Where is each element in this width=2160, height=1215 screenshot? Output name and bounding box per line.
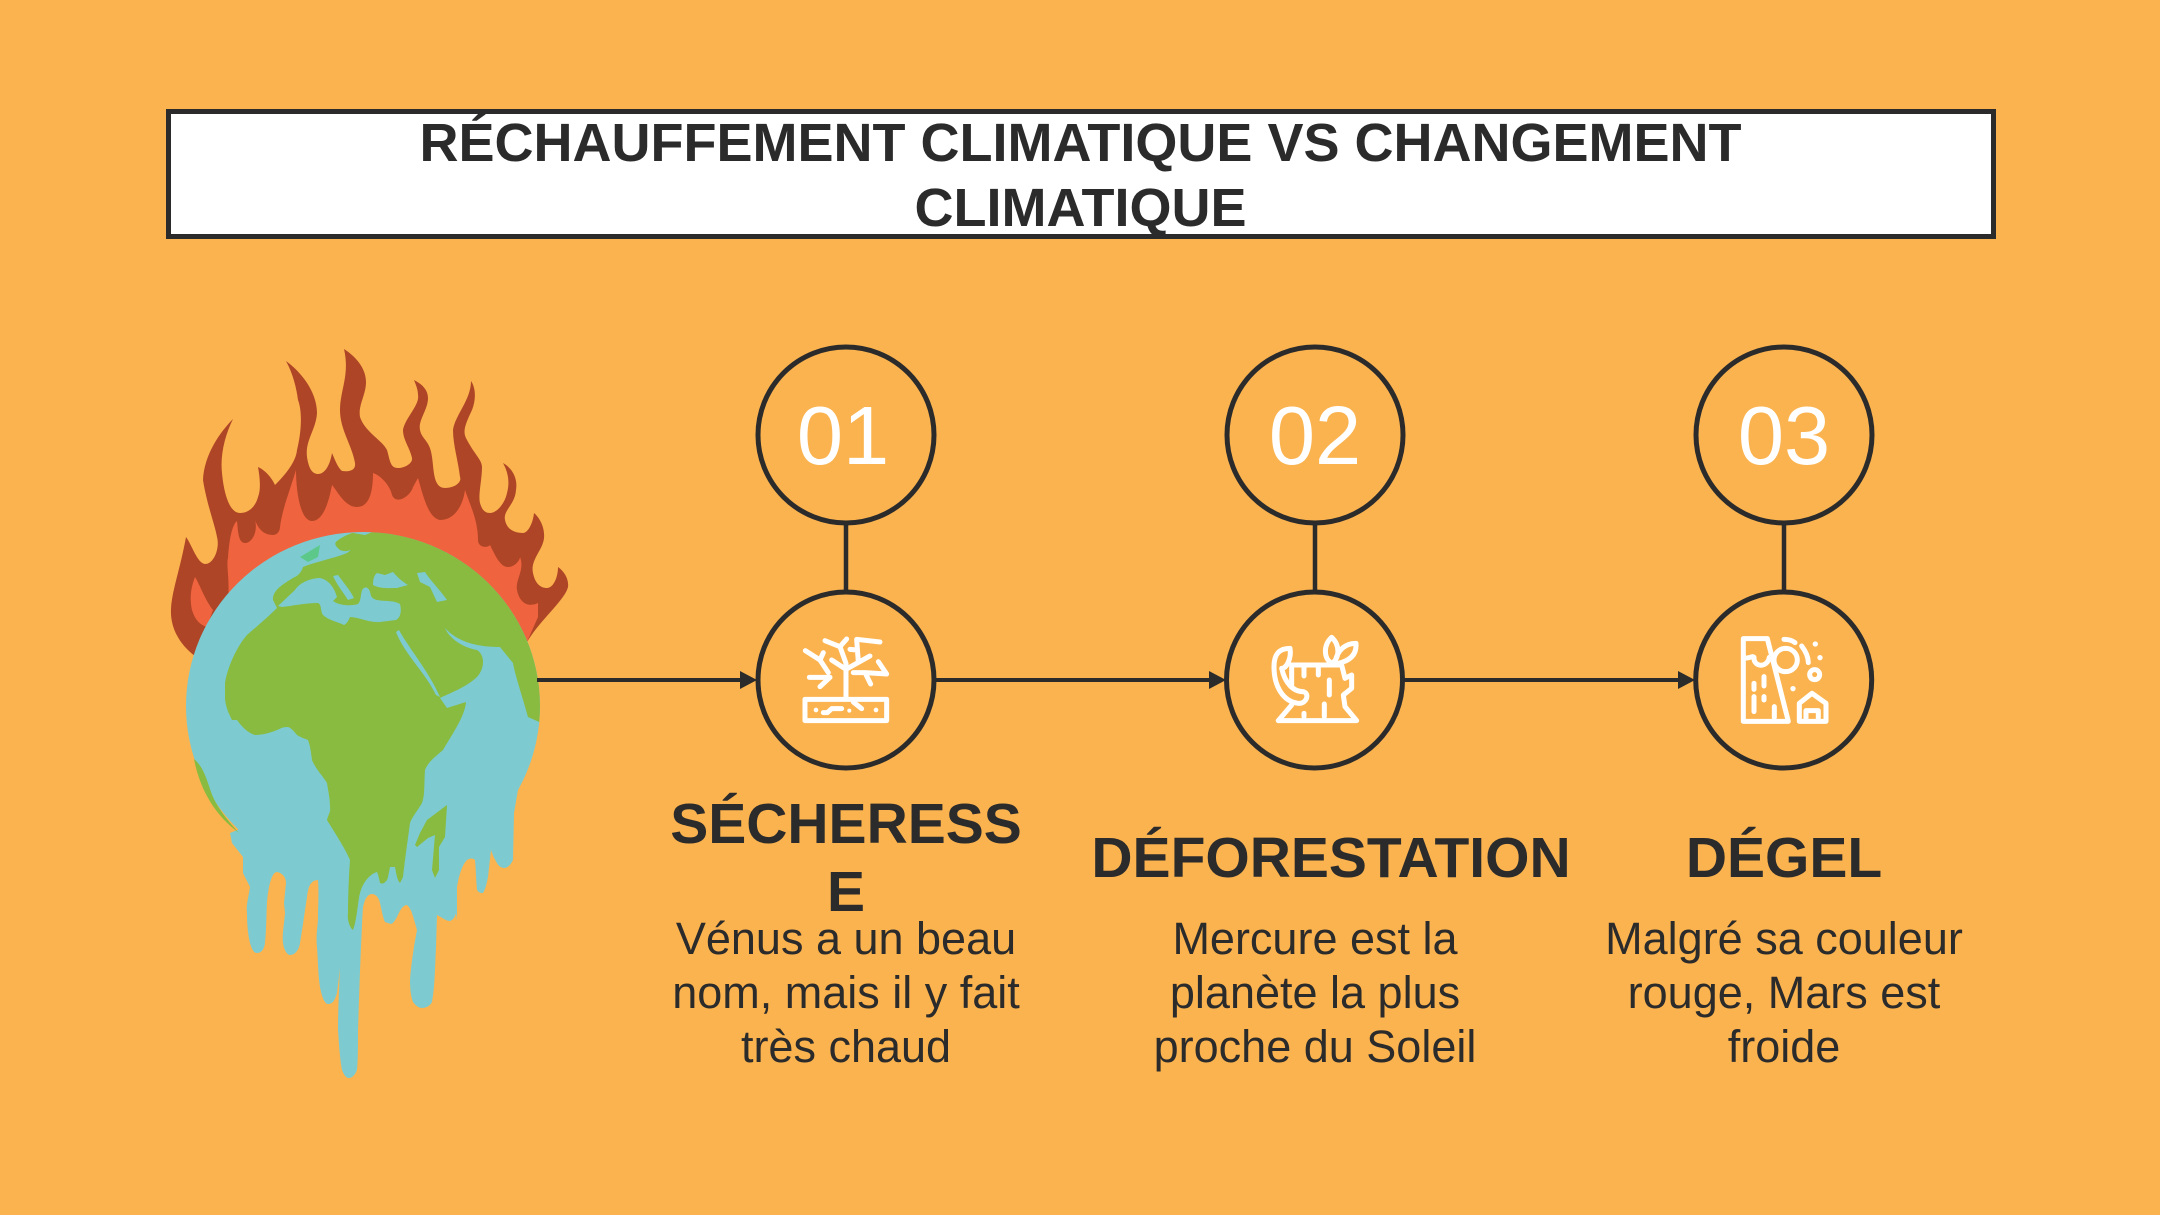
text: dégel description: Malgré sa couleur xyxy=(1605,913,1963,964)
heading: sécheresse xyxy=(670,792,1022,924)
text: déforestation description: proche du Soleil xyxy=(1154,1021,1476,1072)
text: sécheresse description: très chaud xyxy=(741,1021,951,1072)
number circle 01: 01 xyxy=(797,389,889,482)
text: dégel description: froide xyxy=(1728,1021,1840,1072)
icon: dead tree on dry soil xyxy=(758,592,934,768)
heading: sécheresse: E xyxy=(827,860,865,924)
step 02: déforestation xyxy=(1091,347,1571,1072)
number circle 01 xyxy=(758,347,934,592)
number circle 02 xyxy=(1227,347,1403,592)
text: dégel description: rouge, Mars est xyxy=(1628,967,1941,1018)
number circle 03: 03 xyxy=(1738,389,1830,482)
text: dégel description xyxy=(1605,913,1963,1072)
number circle 02: 02 xyxy=(1269,389,1361,482)
icon: tree stump with leaves xyxy=(1226,592,1402,768)
heading: déforestation: DÉFORESTATION xyxy=(1091,826,1571,890)
icon: melting ice and house xyxy=(1696,592,1872,768)
text: sécheresse description: nom, mais il y fait xyxy=(672,967,1020,1018)
text: déforestation description: Mercure est la xyxy=(1172,913,1459,964)
text: déforestation description xyxy=(1154,913,1476,1072)
heading: dégel: DÉGEL xyxy=(1686,826,1882,890)
title: CLIMATIQUE xyxy=(915,178,1246,238)
heading: sécheresse: SÉCHERESS xyxy=(670,792,1022,856)
text: sécheresse description: Vénus a un beau xyxy=(676,913,1016,964)
text: sécheresse description xyxy=(672,913,1020,1072)
number circle 03 xyxy=(1696,347,1872,592)
title xyxy=(168,112,1994,238)
arrow: step 1 to step 2 xyxy=(935,671,1226,689)
text: déforestation description: planète la plus xyxy=(1170,967,1460,1018)
step 01: sécheresse xyxy=(670,347,1022,1072)
arrow: globe to step 1 xyxy=(537,671,757,689)
step 03: dégel xyxy=(1605,347,1963,1072)
arrow: step 2 to step 3 xyxy=(1404,671,1695,689)
illustration: melting earth on fire xyxy=(171,349,568,1078)
title: RÉCHAUFFEMENT CLIMATIQUE VS CHANGEMENT xyxy=(420,113,1741,173)
